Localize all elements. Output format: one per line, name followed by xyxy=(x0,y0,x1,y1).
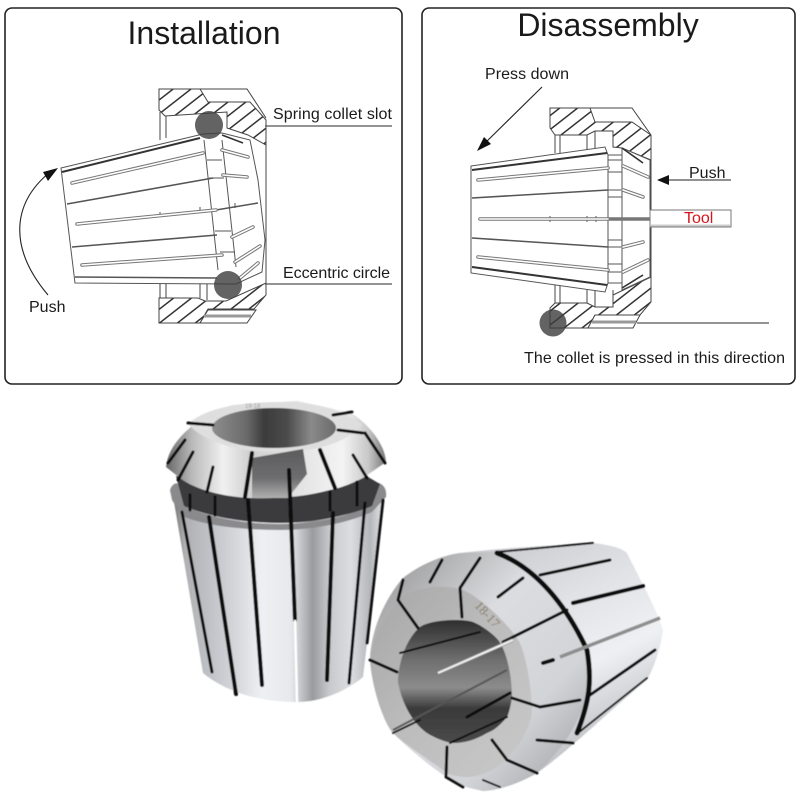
collet body xyxy=(172,490,385,702)
label: spring collet slot: Spring collet slot xyxy=(273,106,393,123)
photo: upright collet xyxy=(166,401,386,702)
label: pressed direction: The collet is pressed in this direction xyxy=(524,350,785,367)
tool bar xyxy=(650,210,731,227)
crown bore xyxy=(212,408,336,448)
end face xyxy=(370,587,532,777)
label: push: Push xyxy=(29,299,65,316)
callout: pressed direction marker xyxy=(540,310,566,336)
bore xyxy=(398,620,512,743)
collet slots xyxy=(168,412,385,694)
crown front facet xyxy=(252,449,307,498)
collet slots xyxy=(370,543,655,787)
diagram: tilted collet, installation xyxy=(61,133,265,284)
crown top ring xyxy=(188,402,362,452)
label: press down: Press down xyxy=(485,66,569,83)
label: tool: Tool xyxy=(684,210,713,227)
arrow: push, curved xyxy=(20,168,58,295)
arrow: push xyxy=(657,175,731,185)
collet crown xyxy=(166,401,386,498)
callout: spring collet slot circle xyxy=(195,111,223,139)
arrow: press down xyxy=(477,87,542,151)
collet neck xyxy=(176,474,380,523)
panel: installation xyxy=(5,8,402,384)
diagram: housing nut, disassembly xyxy=(550,108,651,328)
diagram: housing nut, installation xyxy=(159,89,266,323)
label: push: Push xyxy=(689,165,725,182)
panel: disassembly xyxy=(422,7,795,384)
label: size marking: 18-17 xyxy=(472,598,504,631)
heading: installation: Installation xyxy=(128,15,280,51)
callout: eccentric circle marker xyxy=(214,271,242,299)
leader line xyxy=(637,322,769,324)
diagram: collet, disassembly xyxy=(471,147,650,292)
heading: disassembly: Disassembly xyxy=(517,7,699,43)
conical front ring xyxy=(370,552,589,791)
photo: tilted collet xyxy=(370,543,663,791)
bright slits xyxy=(438,618,660,673)
label: size marking: 19-18 xyxy=(245,404,261,410)
collet rim band xyxy=(170,483,386,530)
open slit xyxy=(295,620,297,702)
collet outer body xyxy=(370,543,663,791)
label: eccentric circle: Eccentric circle xyxy=(283,265,390,282)
